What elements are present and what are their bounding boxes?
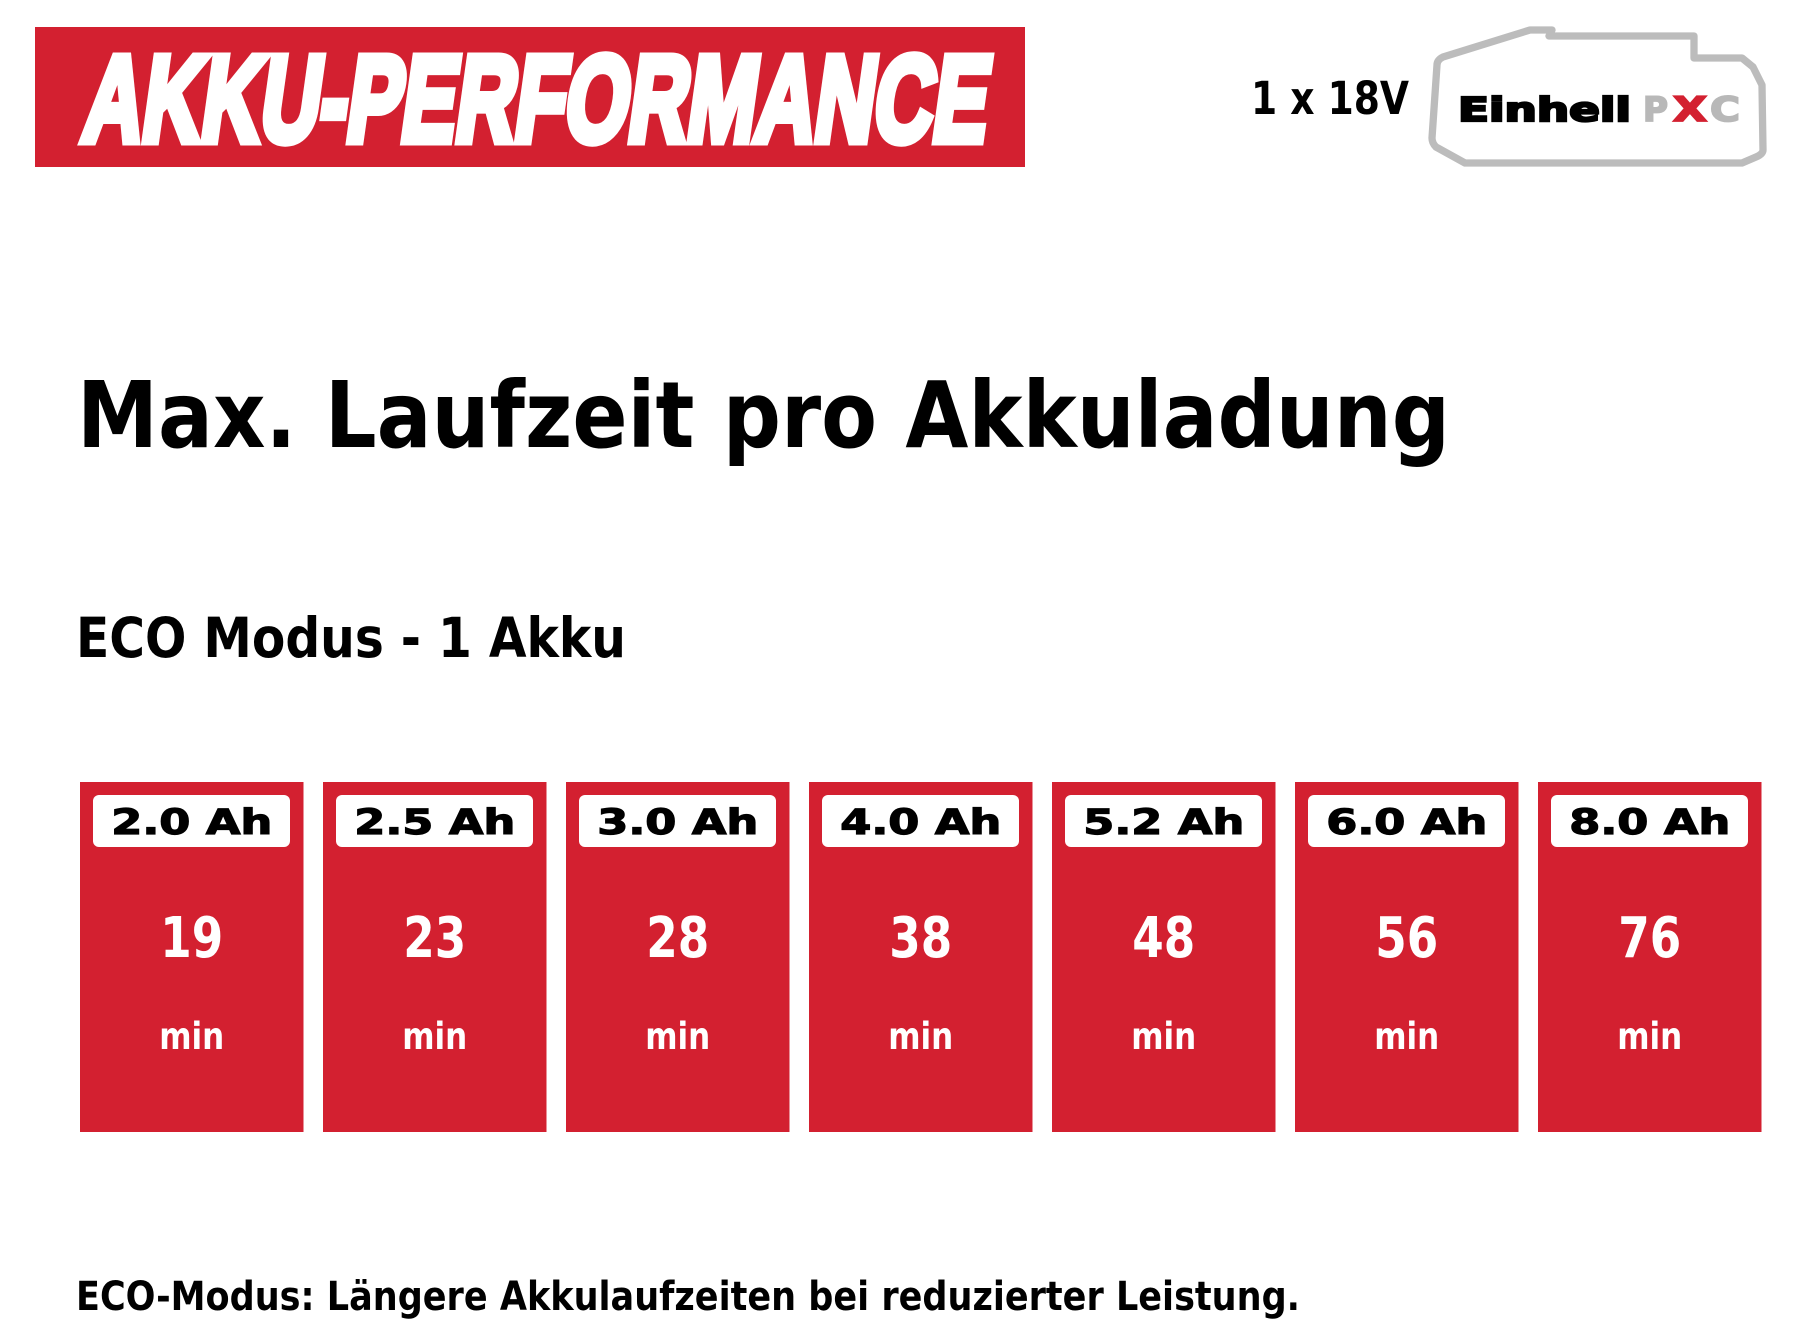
- header banner: Akku-Performance: [35, 27, 1025, 167]
- card: 6.0 Ah: 6.0 Ah: [1326, 803, 1487, 843]
- card: 8.0 Ah: 8.0 Ah: [1569, 803, 1730, 843]
- card: 2.0 Ah: min: [159, 1015, 224, 1058]
- battery outline: [1432, 30, 1763, 163]
- subheading: ECO Modus - 1 Akku: [76, 606, 626, 670]
- card: 2.0 Ah: [80, 782, 304, 1132]
- card: 5.2 Ah: min: [1131, 1015, 1196, 1058]
- card: 2.5 Ah: min: [402, 1015, 467, 1058]
- logo: Einhell: Einhell: [1458, 90, 1631, 129]
- card: 4.0 Ah: 38: [889, 906, 952, 971]
- logo: PXC: C: [1710, 90, 1740, 130]
- card: 4.0 Ah: 4.0 Ah: [840, 803, 1001, 843]
- card: 3.0 Ah: [566, 782, 790, 1132]
- header banner: Akku-Performance: AKKU-PERFORMANCE: [76, 31, 1000, 167]
- battery count label: 1 x 18V: [1251, 72, 1409, 125]
- card: 8.0 Ah: 76: [1618, 906, 1681, 971]
- logo: PXC: P: [1643, 90, 1668, 130]
- card: 3.0 Ah: min: [645, 1015, 710, 1058]
- card: 6.0 Ah: 56: [1375, 906, 1438, 971]
- card: 8.0 Ah: [1538, 782, 1762, 1132]
- footnote: ECO-Modus: Längere Akkulaufzeiten bei reduzierter Leistung.: [76, 1274, 1300, 1320]
- logo: PXC: X: [1673, 90, 1707, 130]
- card: 2.5 Ah: 23: [403, 906, 466, 971]
- card: 4.0 Ah: min: [888, 1015, 953, 1058]
- card: 3.0 Ah: 28: [646, 906, 709, 971]
- card: 5.2 Ah: [1052, 782, 1276, 1132]
- card: 4.0 Ah: [809, 782, 1032, 1132]
- card: 2.0 Ah: 19: [160, 906, 223, 971]
- logo: PXC: [1643, 90, 1740, 130]
- card: 3.0 Ah: 3.0 Ah: [597, 803, 758, 843]
- card: 6.0 Ah: [1295, 782, 1518, 1132]
- card: 8.0 Ah: min: [1617, 1015, 1682, 1058]
- card: 2.0 Ah: 2.0 Ah: [111, 803, 272, 843]
- card: 6.0 Ah: min: [1374, 1015, 1439, 1058]
- main heading: Max. Laufzeit pro Akkuladung: [77, 362, 1450, 469]
- card: 2.5 Ah: [323, 782, 546, 1132]
- card: 5.2 Ah: 5.2 Ah: [1083, 803, 1244, 843]
- runtime card row: [80, 782, 1762, 1132]
- card: 2.5 Ah: 2.5 Ah: [354, 803, 515, 843]
- card: 5.2 Ah: 48: [1132, 906, 1195, 971]
- icon: Einhell PXC battery: [1432, 30, 1763, 163]
